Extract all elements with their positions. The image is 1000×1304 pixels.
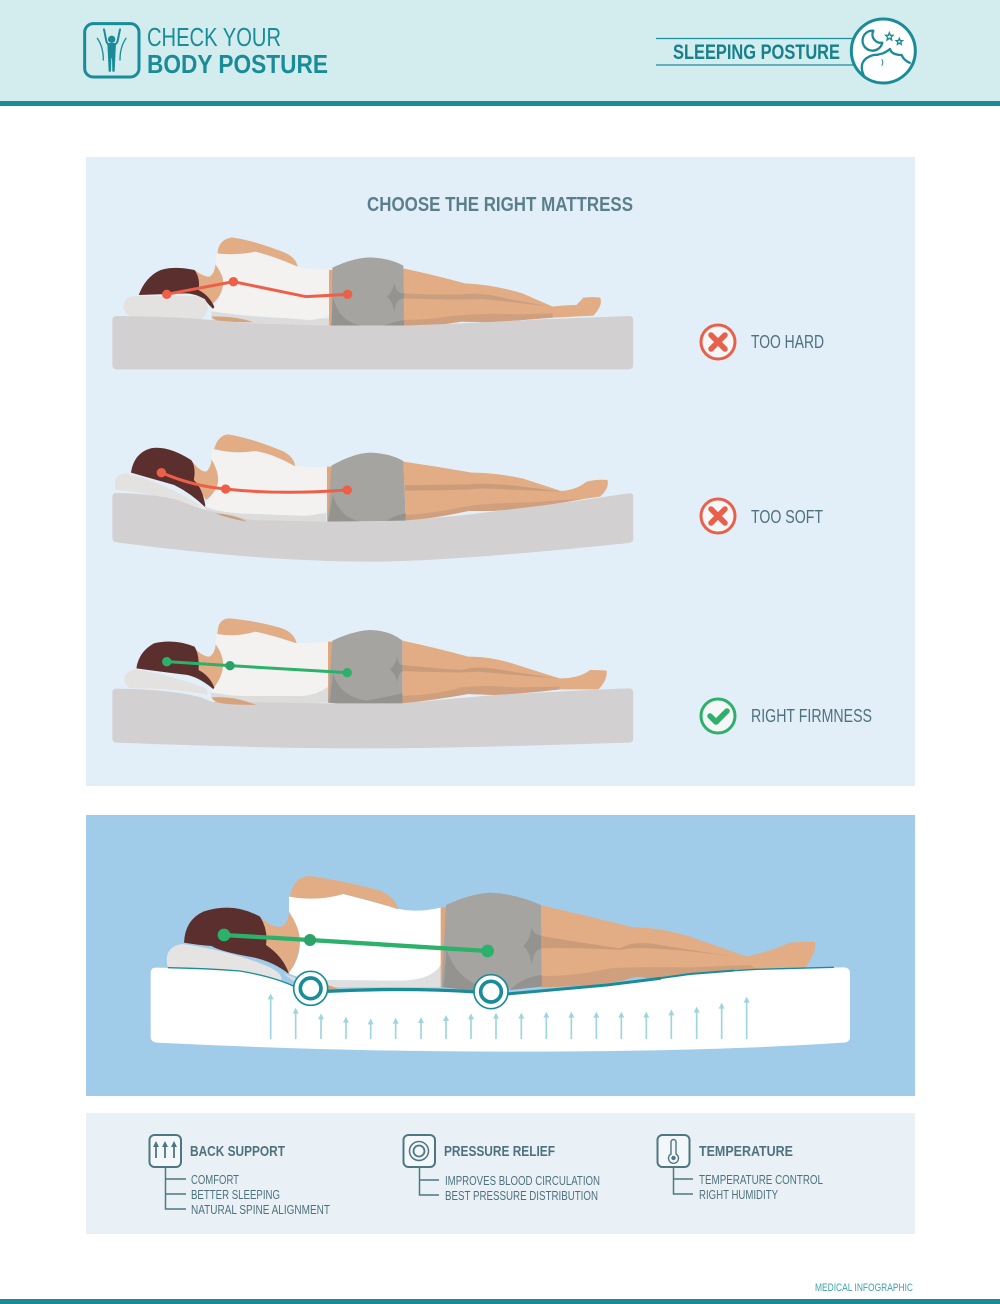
legend: back support: NATURAL SPINE ALIGNMENT (191, 1202, 330, 1217)
icon: sleeping head with moon and stars (851, 19, 915, 83)
heading: sleeping posture: SLEEPING POSTURE (673, 41, 840, 64)
legend: back support: BACK SUPPORT (190, 1143, 285, 1160)
icon: green check right firmness (701, 699, 735, 733)
label: too soft: TOO SOFT (751, 507, 823, 527)
title: check your body posture: BODY POSTURE (147, 49, 328, 79)
illustration: correct spine alignment on mattress (151, 876, 850, 1052)
spine line (218, 929, 494, 957)
label: too hard: TOO HARD (751, 332, 824, 352)
legend: temperature (658, 1135, 823, 1202)
upward arrows (268, 993, 750, 1039)
legend: back support (150, 1135, 330, 1217)
body (184, 876, 815, 991)
illustration: right firmness mattress (112, 618, 633, 748)
legend: pressure relief (404, 1135, 600, 1203)
mattress contour line (168, 967, 833, 994)
footer band (0, 1299, 1000, 1304)
icon: body posture (85, 24, 139, 77)
header band (0, 0, 1000, 106)
mattress (151, 967, 850, 1052)
legend: temperature: TEMPERATURE CONTROL (699, 1172, 823, 1187)
legend: back support: BETTER SLEEPING (191, 1187, 280, 1202)
pressure ring: shoulder (294, 971, 328, 1005)
panel: detailed mattress support (86, 815, 915, 1096)
legend: pressure relief: BEST PRESSURE DISTRIBUTION (445, 1188, 598, 1203)
legend: temperature: TEMPERATURE (699, 1143, 793, 1160)
title: check your body posture: CHECK YOUR (147, 22, 281, 52)
pressure ring: hip (474, 975, 508, 1009)
label: right firmness: RIGHT FIRMNESS (751, 706, 872, 726)
panel: benefits legend (86, 1113, 915, 1234)
illustration: too soft mattress (112, 434, 633, 562)
title: check your body posture (147, 22, 328, 79)
icon: red cross too hard (701, 325, 735, 359)
legend: pressure relief: PRESSURE RELIEF (444, 1143, 555, 1160)
illustration: too hard mattress (112, 237, 633, 369)
legend: temperature: RIGHT HUMIDITY (699, 1187, 778, 1202)
footer caption: MEDICAL INFOGRAPHIC (815, 1282, 913, 1294)
legend: pressure relief: IMPROVES BLOOD CIRCULATION (445, 1173, 600, 1188)
heading: choose the right mattress: CHOOSE THE RIGHT MATTRESS (367, 194, 633, 216)
icon: red cross too soft (701, 499, 735, 533)
legend: back support: COMFORT (191, 1172, 239, 1187)
pillow (167, 944, 282, 985)
